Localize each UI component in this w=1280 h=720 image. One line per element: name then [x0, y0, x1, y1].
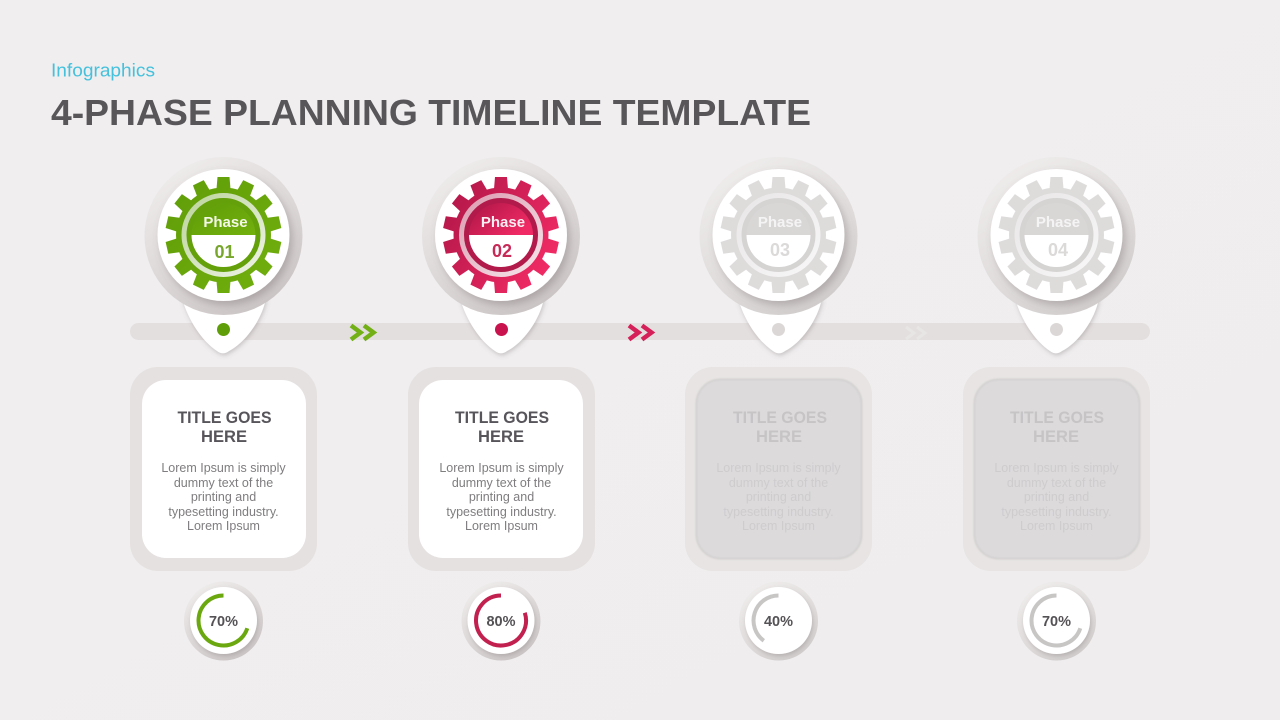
card body: Lorem Ipsum is simply [439, 461, 564, 475]
card frame [408, 367, 595, 571]
card body: Lorem Ipsum is simply [161, 461, 286, 475]
badge top [469, 203, 533, 235]
card heading: TITLE GOES [178, 409, 272, 427]
progress dial 4: 70%: 70% [1042, 613, 1071, 630]
badge top [192, 203, 256, 235]
pin tail [1015, 298, 1099, 353]
white disc [435, 169, 567, 301]
outer disc [422, 157, 580, 315]
card face [696, 380, 862, 558]
card heading: TITLE GOES [733, 409, 827, 427]
pin tail [460, 298, 544, 353]
card body: dummy text of the [1007, 476, 1106, 490]
phase 2 marker [422, 157, 580, 353]
outer disc [700, 157, 858, 315]
panel: card 1 [130, 367, 317, 571]
gear [996, 175, 1116, 295]
phase label: Phase [1036, 214, 1080, 231]
card heading: TITLE GOES [1010, 409, 1104, 427]
card body: Lorem Ipsum [465, 519, 538, 533]
arrow: green chevrons [351, 326, 374, 340]
card face [142, 380, 306, 558]
card body: Lorem Ipsum [187, 519, 260, 533]
card heading: HERE [756, 428, 802, 446]
gear [718, 175, 838, 295]
phase label: Phase [203, 214, 248, 231]
pin dot [495, 323, 508, 336]
card body: typesetting industry. [723, 505, 834, 519]
card body: dummy text of the [174, 476, 273, 490]
card frame [130, 367, 317, 571]
panel: card 3 [685, 367, 872, 571]
phase number: 02 [492, 241, 512, 261]
card body: typesetting industry. [1001, 505, 1112, 519]
phase number: 04 [1048, 240, 1068, 260]
pin tail [182, 298, 266, 353]
card frame [963, 367, 1150, 571]
progress dial 1: 70% [184, 582, 263, 660]
progress dial 3: 40% [739, 582, 818, 660]
pin dot [772, 323, 785, 336]
timeline bar [130, 323, 1150, 340]
pin tail [738, 298, 822, 353]
card heading: HERE [478, 428, 524, 446]
card body: dummy text of the [452, 476, 551, 490]
progress dial 2: 80% [462, 582, 540, 660]
progress dial 2: 80%: 80% [486, 613, 516, 630]
card heading: TITLE GOES [455, 409, 549, 427]
card body: printing and [746, 490, 811, 504]
phase number: 03 [770, 240, 790, 260]
badge bottom [469, 235, 533, 267]
pin dot [1050, 323, 1063, 336]
card body: Lorem Ipsum [1020, 519, 1093, 533]
card body: typesetting industry. [446, 505, 557, 519]
card body: typesetting industry. [168, 505, 279, 519]
badge bottom [192, 235, 256, 267]
outer disc [144, 157, 302, 315]
panel: card 2 [408, 367, 595, 571]
title: 4-PHASE PLANNING TIMELINE TEMPLATE [51, 92, 811, 133]
badge top [1024, 203, 1088, 235]
card body: printing and [191, 490, 256, 504]
panel: card 4 [963, 367, 1150, 571]
phase 1 marker [144, 157, 302, 353]
pin dot [217, 323, 230, 336]
gear ring [462, 196, 540, 274]
badge top [746, 203, 810, 235]
card frame [685, 367, 872, 571]
gear [441, 175, 561, 295]
card body: dummy text of the [729, 476, 828, 490]
white disc [712, 169, 844, 301]
gear ring [1017, 196, 1096, 274]
gear ring [739, 196, 818, 274]
arrow: faint chevrons [906, 327, 925, 339]
white disc [158, 169, 290, 301]
card face [419, 380, 583, 558]
progress dial 3: 40%: 40% [764, 613, 793, 630]
phase 4 marker [978, 157, 1136, 353]
card body: printing and [1024, 490, 1089, 504]
card heading: HERE [1033, 428, 1079, 446]
card face [974, 380, 1140, 558]
progress dial 4: 70% [1017, 582, 1096, 660]
card body: Lorem Ipsum is simply [716, 461, 841, 475]
phase label: Phase [481, 214, 525, 231]
card body: Lorem Ipsum [742, 519, 815, 533]
outer disc [978, 157, 1136, 315]
badge bottom [1024, 235, 1088, 267]
white disc [990, 169, 1122, 301]
gear [164, 175, 284, 295]
phase number: 01 [214, 242, 235, 262]
card heading: HERE [201, 428, 247, 446]
phase 3 marker [700, 157, 858, 353]
gear ring [184, 196, 263, 274]
card body: printing and [469, 490, 534, 504]
progress dial 1: 70%: 70% [209, 613, 238, 630]
card body: Lorem Ipsum is simply [994, 461, 1119, 475]
badge bottom [746, 235, 810, 267]
phase label: Phase [758, 214, 802, 231]
arrow: pink chevrons [629, 326, 652, 340]
eyebrow: Infographics: Infographics [51, 60, 155, 80]
